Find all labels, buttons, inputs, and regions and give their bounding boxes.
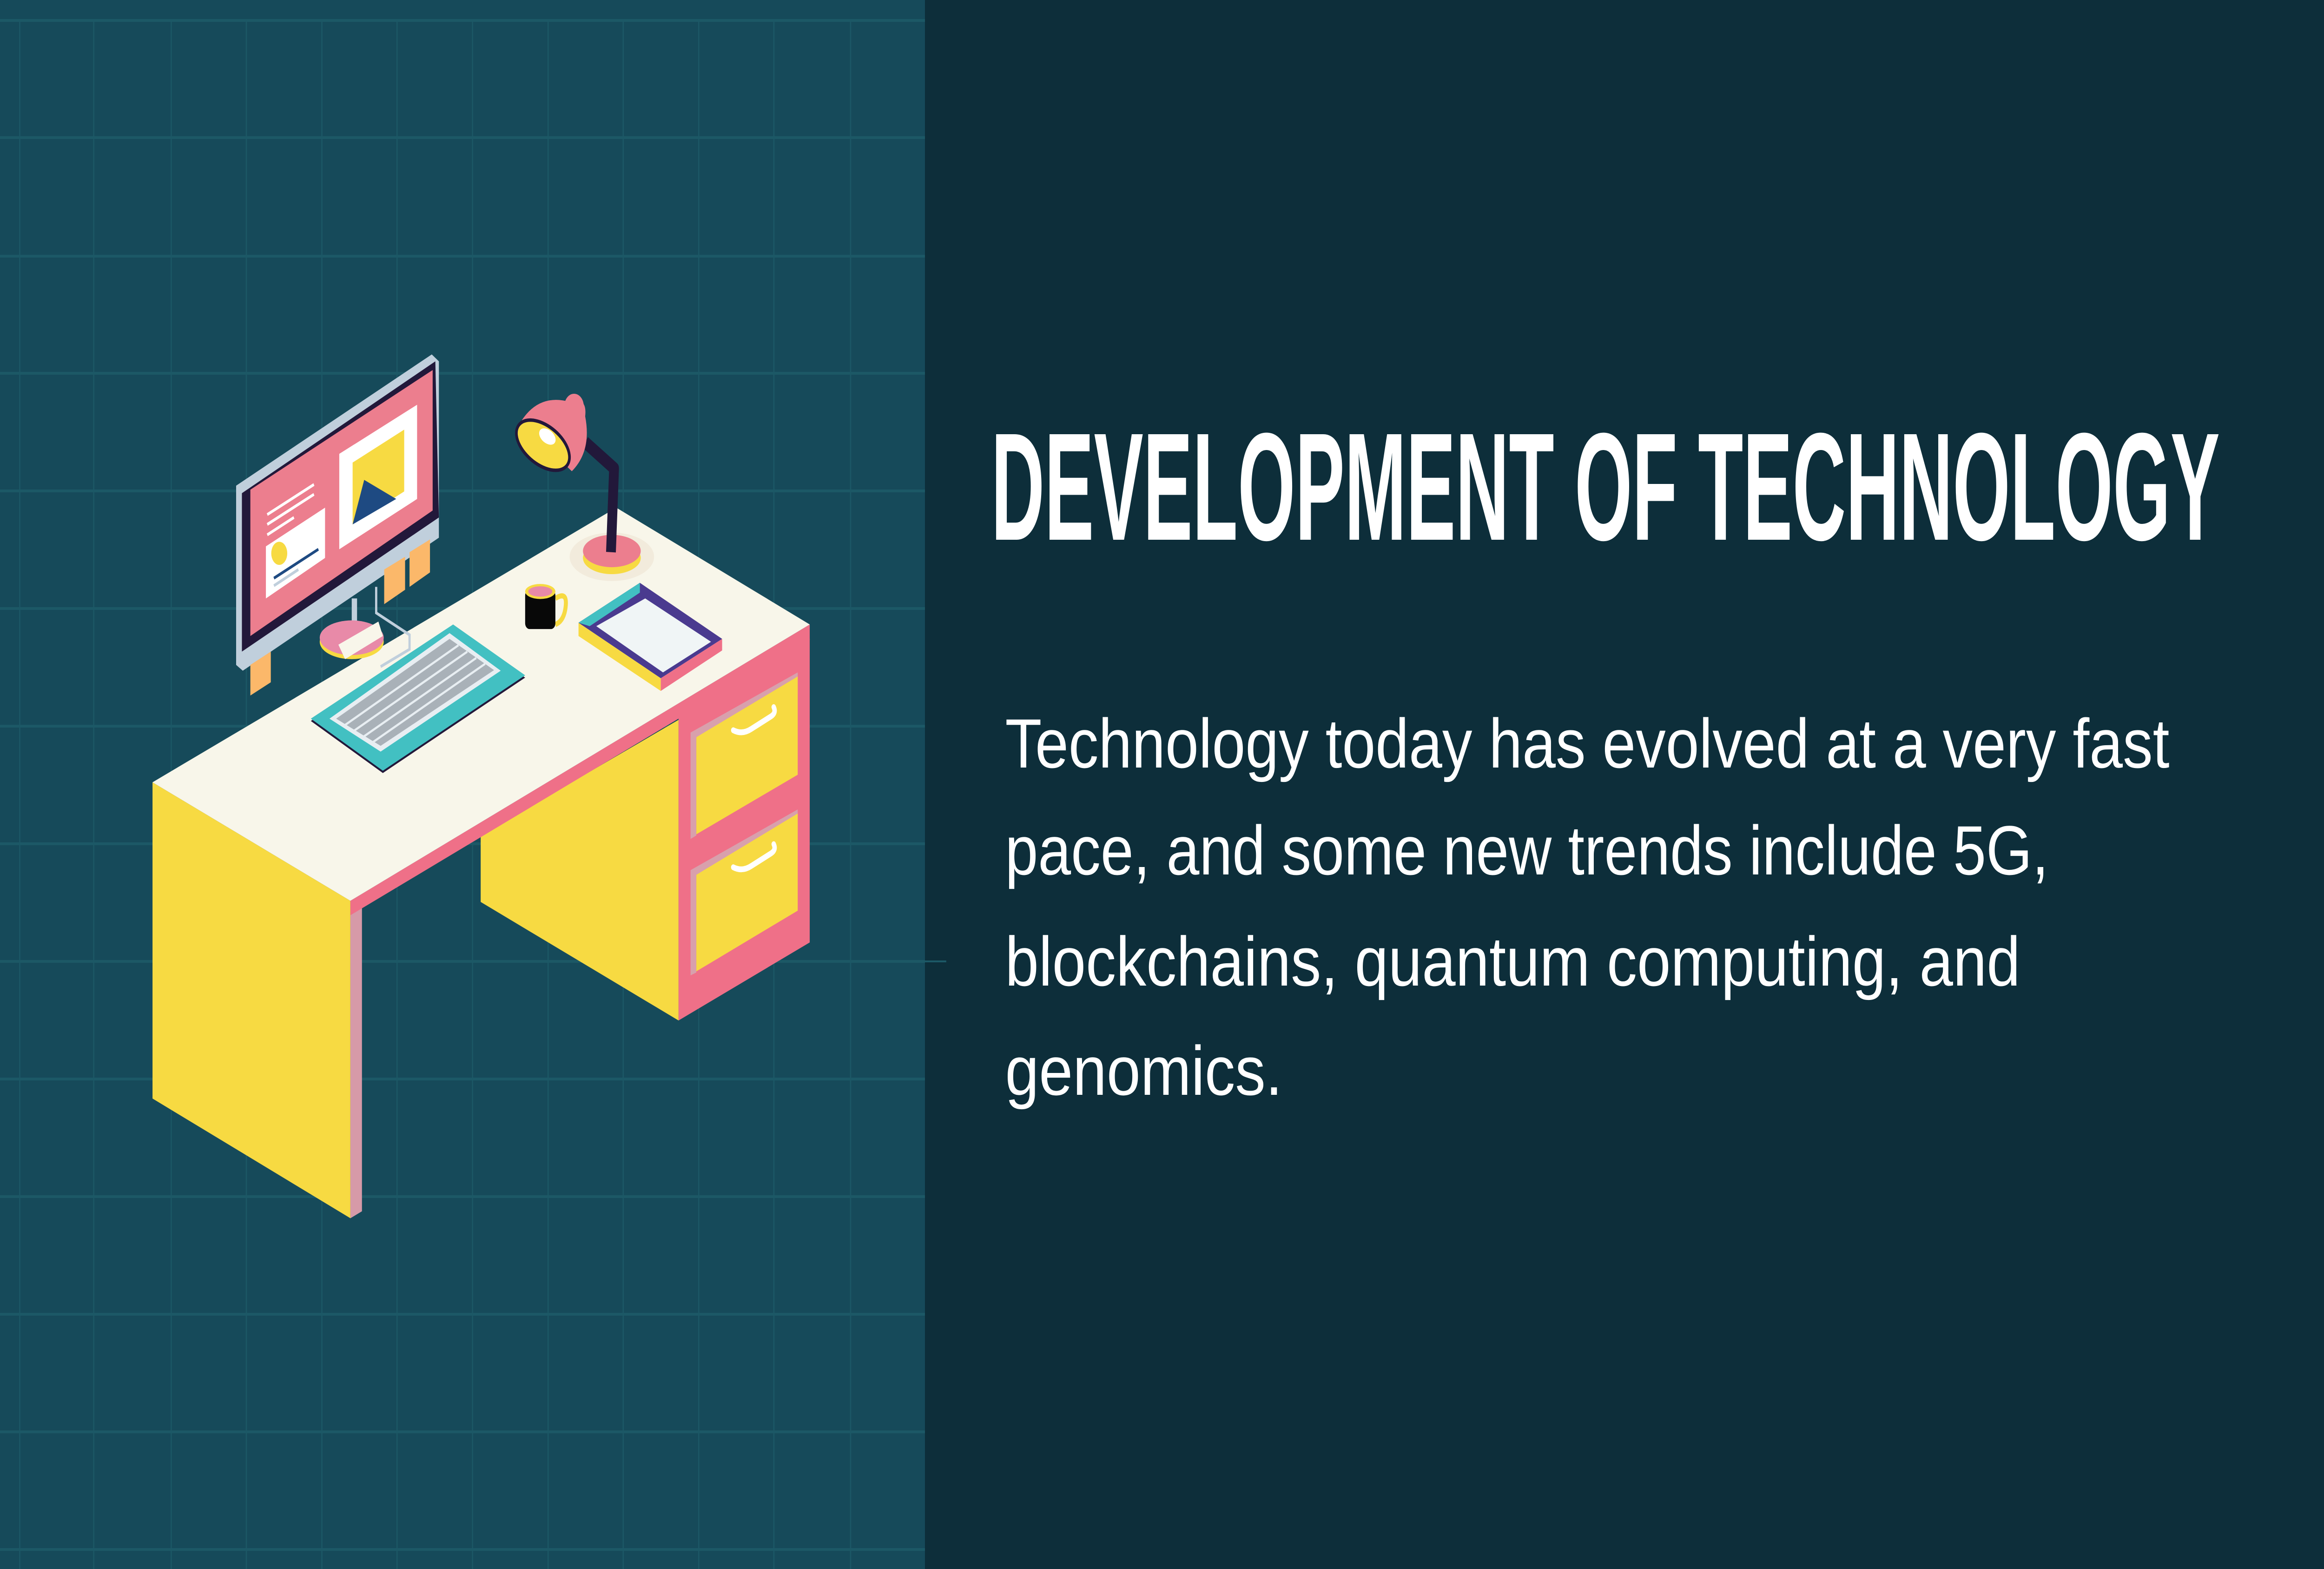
illustration: isometric desk: [152, 354, 810, 1218]
text block: description: [1005, 705, 2170, 1110]
text block: description: blockchains, quantum computing, and: [1005, 923, 2020, 1001]
text block: description: Technology today has evolved at a very fast: [1005, 705, 2170, 783]
desk body: [152, 508, 810, 1218]
text block: description: genomics.: [1005, 1032, 1282, 1110]
icon: document tray: [579, 583, 722, 691]
text block: description: pace, and some new trends include 5G,: [1005, 812, 2049, 890]
icon: lamp: [510, 394, 654, 581]
icon: keyboard: [311, 624, 525, 773]
icon: monitor: [236, 354, 439, 695]
panel: left grid background: [0, 0, 946, 1569]
desk drawers: [691, 672, 798, 975]
icon: mug: [525, 584, 566, 629]
